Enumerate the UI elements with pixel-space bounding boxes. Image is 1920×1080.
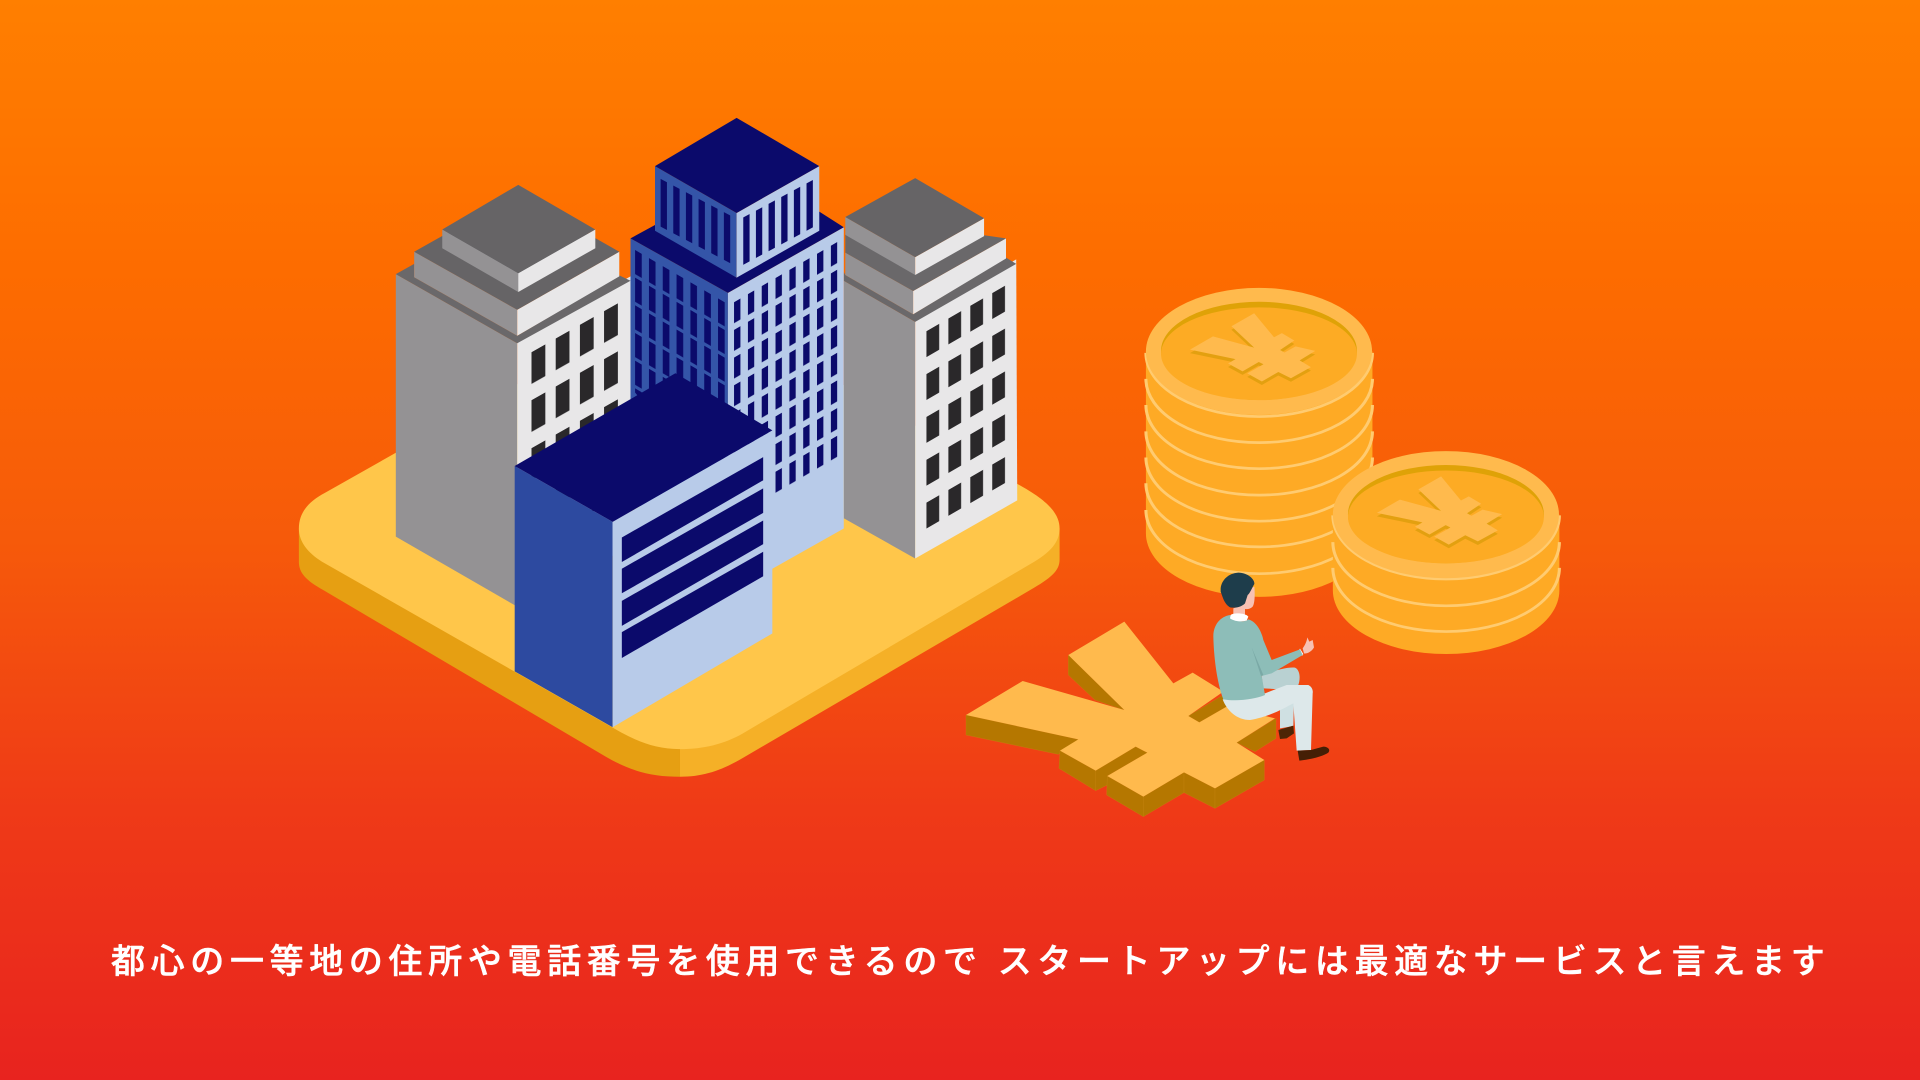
seated person — [1213, 573, 1329, 761]
front blue building — [515, 373, 772, 727]
platform — [299, 292, 1060, 777]
central blue tower — [631, 118, 844, 569]
money scene — [966, 288, 1559, 817]
right grey tower — [844, 178, 1017, 558]
left grey tower — [396, 185, 631, 607]
large coin stack — [1146, 288, 1372, 597]
caption: 都心の一等地の住所や電話番号を使用できるので スタートアップには最適なサービスと言えます — [111, 943, 1830, 981]
large yen symbol — [966, 622, 1276, 817]
city block — [299, 118, 1060, 777]
small coin stack — [1333, 451, 1559, 654]
